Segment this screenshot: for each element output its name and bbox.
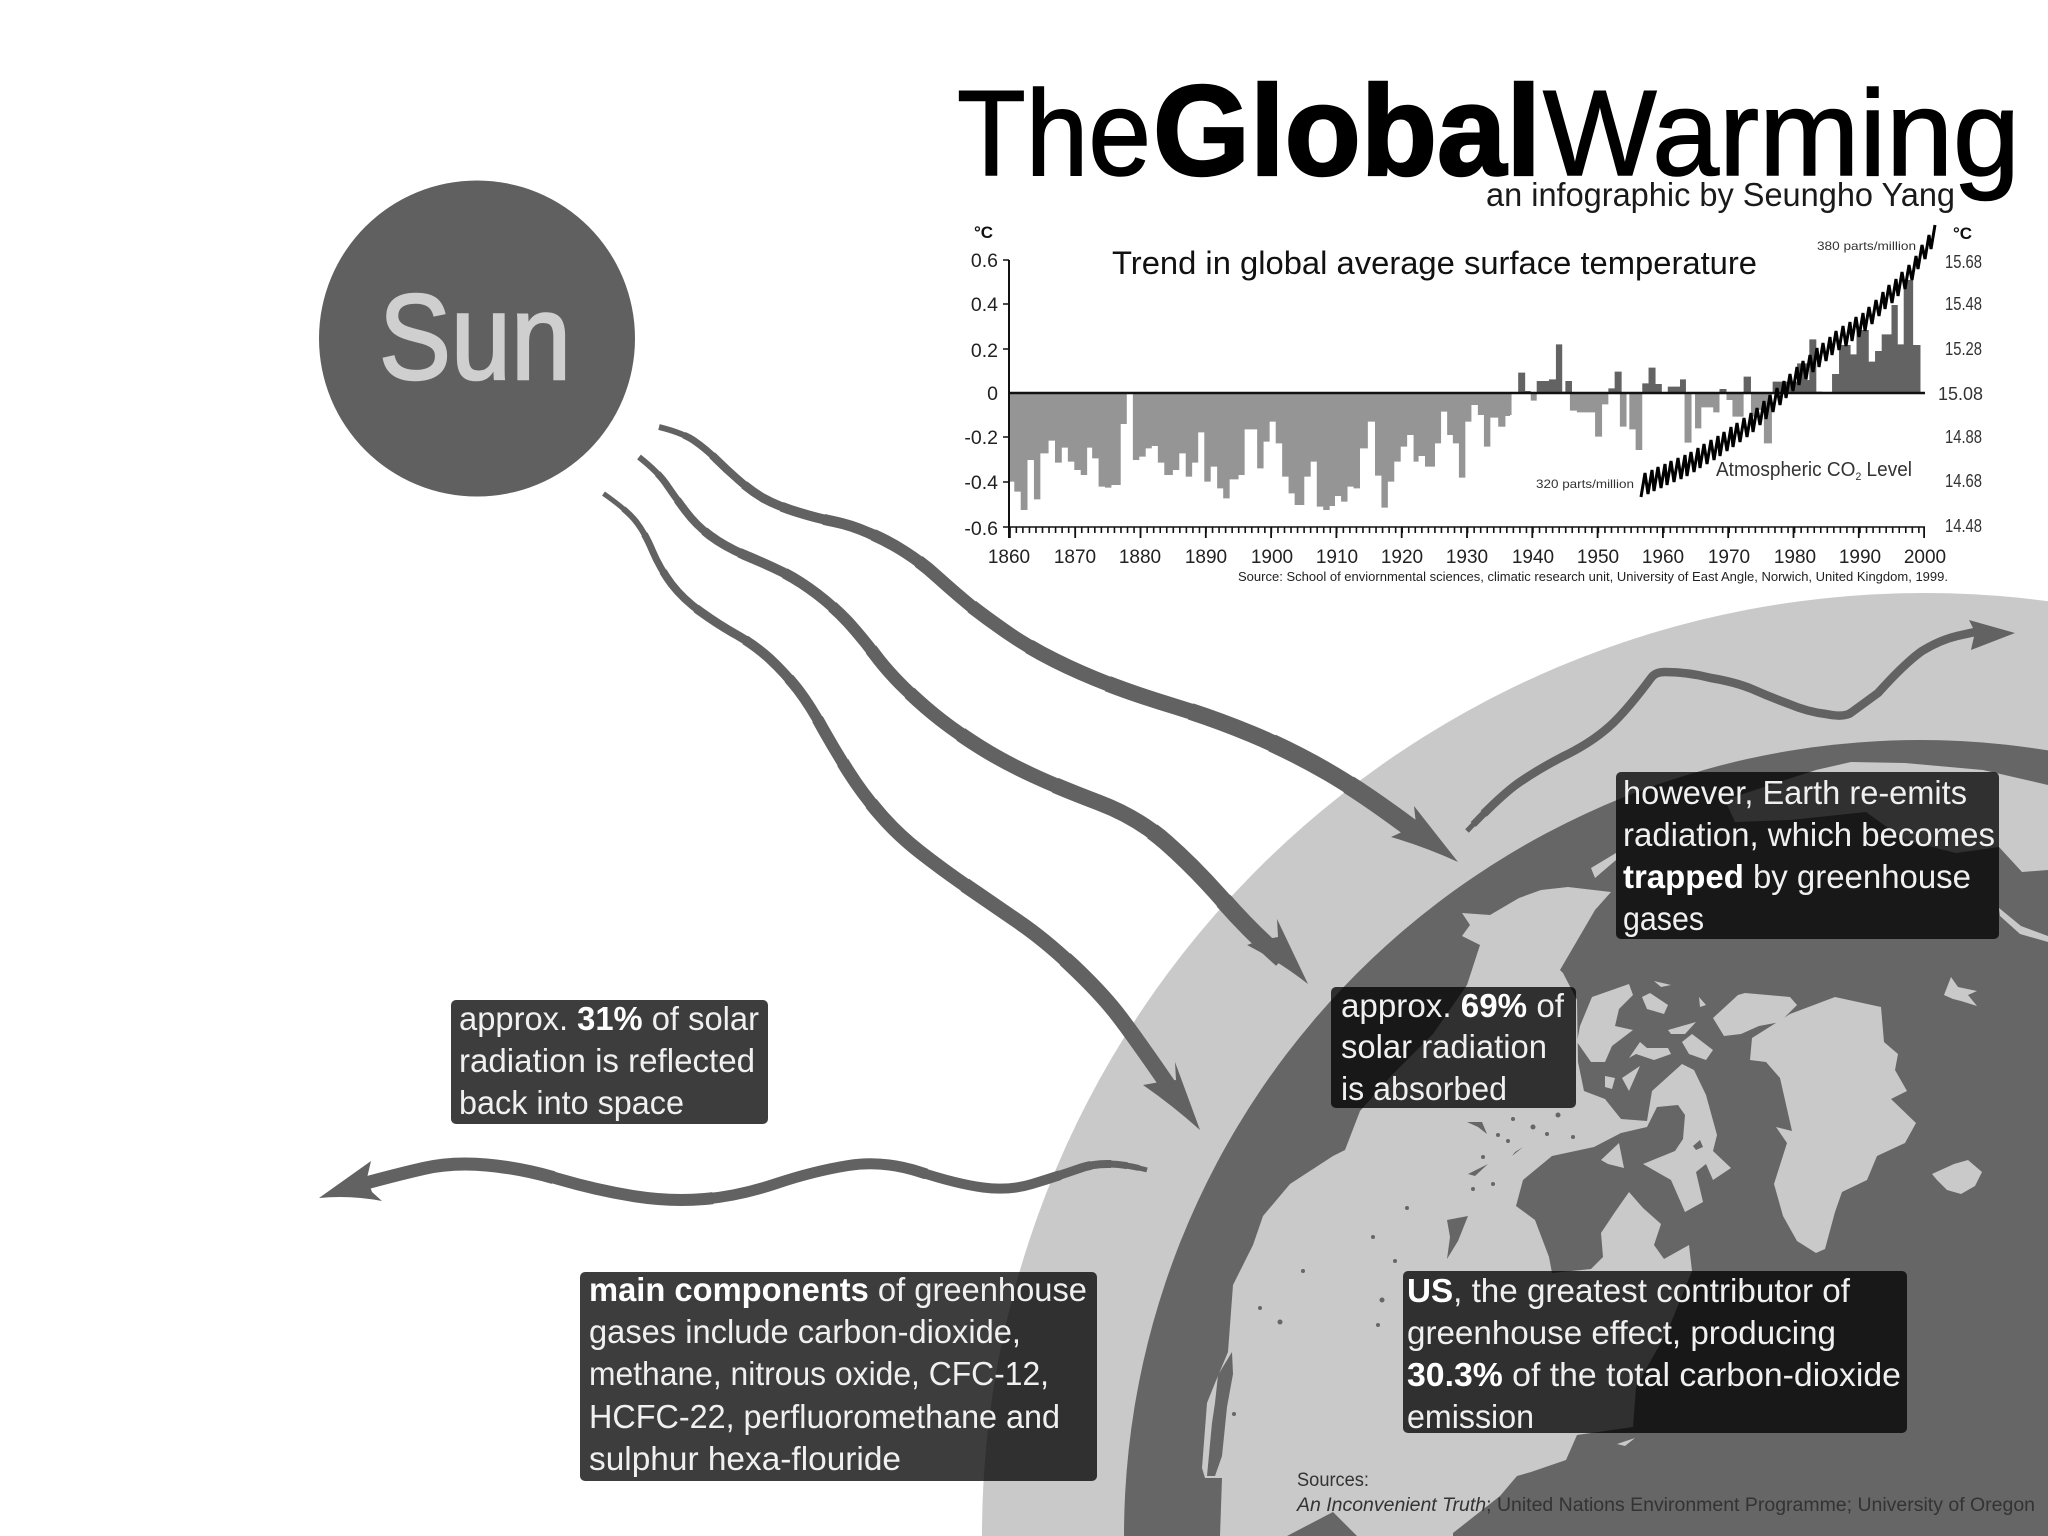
left axis labels [964,223,998,540]
callout: main components: sulphur hexa-flouride [589,1440,901,1477]
callout: 69% absorbed: approx. 69% of [1341,987,1565,1024]
right axis labels: 15.48 [1945,294,1982,314]
title [957,60,2020,203]
callout: trapped re-emission: radiation, which becomes [1623,816,1995,853]
CO2 annotations [1536,239,1916,491]
callout: 31% reflected [451,1000,768,1124]
year labels [988,547,1946,568]
lakes and sea channels [1207,1112,1703,1476]
land masses [1202,762,2048,1536]
Arctic islands [1577,984,1633,1062]
subtitle: an infographic by Seungho Yang [1486,176,1955,213]
callout: 69% absorbed: solar radiation [1341,1028,1547,1065]
callout: US contributor: US, the greatest contributor of [1407,1272,1851,1309]
callout: main components: methane, nitrous oxide, CFC-12, [589,1355,1049,1392]
callout: US contributor [1403,1271,1907,1435]
atmosphere circle [982,593,2048,1536]
chart source: Source: School of enviornmental sciences, climatic research unit, University of East Angle, Norwich, United Kingdom, 1999. [1238,569,1948,584]
chart: trend in global average surface temperature [964,223,1983,584]
left axis labels: 0.2 [971,340,998,362]
Russia [1725,762,2048,872]
left axis labels: -0.2 [964,427,998,449]
right axis labels: 14.68 [1945,471,1982,491]
CO2 annotations: 2 [1855,471,1861,483]
sources: An Inconvenient Truth; United Nations Environment Programme; University of Oregon [1296,1495,2035,1516]
callout: main components [580,1271,1097,1481]
callout: 69% absorbed: is absorbed [1341,1070,1507,1107]
sources [1296,1470,2035,1516]
sun: Sun [379,269,571,405]
North America [1202,887,1731,1536]
left axis labels: 0 [987,383,998,405]
right axis labels: 14.48 [1945,516,1982,536]
title: Global [1153,60,1541,203]
callout: trapped re-emission: trapped by greenhouse [1623,858,1971,895]
arrow: incoming solar radiation 2 [639,457,1308,984]
earth: atmosphere and globe [982,593,2048,1536]
positive anomaly bars [1518,280,1920,393]
year labels: 1940 [1512,547,1554,568]
year labels: 1990 [1839,547,1881,568]
left axis labels: °C [974,223,993,242]
chart heading: Trend in global average surface temperature [1112,245,1757,281]
Greenland [1750,997,1916,1253]
callout: trapped re-emission: gases [1623,900,1704,937]
earth ocean circle [1124,740,2048,1536]
callout: 31% reflected: approx. 31% of solar [459,1000,759,1037]
left axis labels: -0.4 [964,472,998,494]
year labels: 1980 [1774,547,1816,568]
right axis labels: 15.68 [1945,252,1982,272]
callout: US contributor: emission [1407,1398,1534,1435]
callout: US contributor: 30.3% of the total carbon-dioxide [1407,1356,1901,1393]
callout: main components: main components of greenhouse [589,1271,1087,1308]
CO2 annotations: 380 parts/million [1817,239,1916,253]
year labels: 1960 [1642,547,1684,568]
left axis labels: 0.6 [971,250,998,272]
negative anomaly bars, 1935-2000 [1500,393,1772,450]
right axis labels: 15.08 [1938,384,1983,404]
CO2 annotations: 320 parts/million [1536,477,1634,491]
year labels: 1950 [1577,547,1619,568]
CO2 annotations: Atmospheric CO [1716,459,1863,481]
year labels: 1890 [1185,547,1227,568]
Kamchatka strip [1999,908,2048,942]
arrow: incoming solar radiation 3 [604,494,1200,1130]
callout: main components: HCFC-22, perfluoromethane and [589,1398,1060,1435]
title: The [957,65,1151,201]
CO2 curve [1641,225,1935,497]
CO2 annotations: Level [1861,459,1912,481]
right axis labels: 15.28 [1945,339,1982,359]
year labels: 1920 [1381,547,1423,568]
year labels: 1900 [1251,547,1293,568]
right axis labels: °C [1953,224,1972,243]
axes [1003,260,1926,538]
right axis labels: 14.88 [1945,427,1982,447]
year labels: 1910 [1316,547,1358,568]
arrow: incoming solar radiation 1 [659,427,1458,862]
left axis labels: 0.4 [971,294,998,316]
year labels: 1970 [1708,547,1750,568]
year labels: 1930 [1446,547,1488,568]
Aleutian fragment [1591,853,1616,878]
sun [319,180,635,496]
callout: trapped re-emission: however, Earth re-emits [1623,774,1967,811]
year labels: 1870 [1054,547,1096,568]
right axis labels [1938,224,1983,536]
sources: Sources: [1297,1470,1369,1491]
callout: 31% reflected: back into space [459,1084,684,1121]
callout: main components: gases include carbon-dioxide, [589,1313,1021,1350]
year labels: 1860 [988,547,1030,568]
callout: trapped re-emission [1616,772,1999,939]
callout: 31% reflected: radiation is reflected [459,1042,755,1079]
arrow: re-emitted radiation [1467,620,2015,831]
Svalbard [1944,977,1977,1006]
title: Warming [1543,65,2020,201]
negative anomaly bars, 1860-1935 [1008,393,1510,510]
callout: 69% absorbed [1331,987,1576,1108]
year labels: 1880 [1119,547,1161,568]
left axis labels: -0.6 [964,518,998,540]
year labels: 2000 [1904,547,1946,568]
Iceland [1932,1160,1982,1194]
arrow: reflected radiation [319,1161,1147,1201]
callout: US contributor: greenhouse effect, producing [1407,1314,1836,1351]
